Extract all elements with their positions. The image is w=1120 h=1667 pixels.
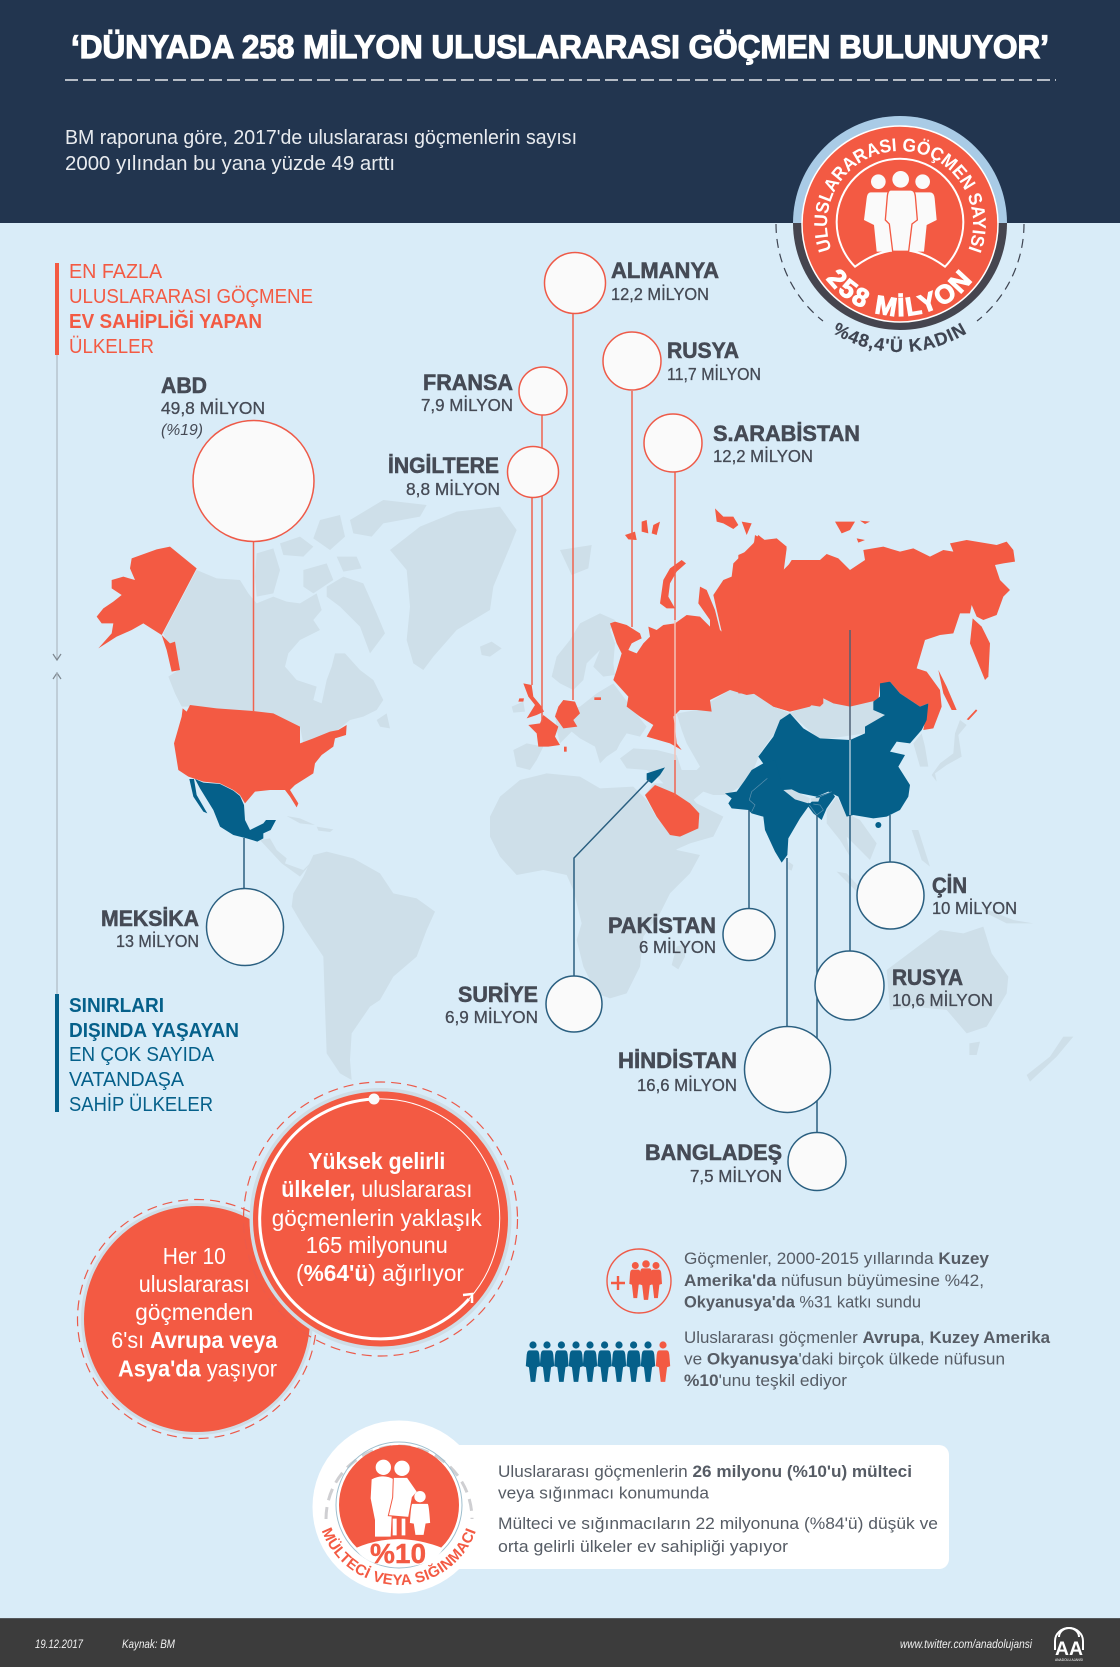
text: population growth: Amerika'da nüfusun büyümesine %42, [684, 1271, 981, 1290]
marker: Meksika: MEKSİKA [101, 906, 199, 931]
footer: 19.12.2017 [35, 1637, 84, 1651]
marker: Çin: ÇİN [932, 873, 967, 898]
landmass: South America and Africa [292, 773, 723, 1080]
marker: Fransa [421, 367, 567, 722]
header band [0, 0, 1120, 223]
subtitle: 2000 yılından bu yana yüzde 49 arttı [65, 153, 395, 175]
panel: refugees text: orta gelirli ülkeler ev sahipliği yapıyor [498, 1537, 788, 1556]
marker: Almanya [544, 252, 719, 700]
text: population growth: Göçmenler, 2000-2015 yıllarında Kuzey [684, 1249, 988, 1268]
legend: host countries: EV SAHİPLİĞİ YAPAN [69, 309, 262, 333]
legend: origin countries [55, 994, 245, 1116]
marker: Rusya (host): 11,7 MİLYON [667, 364, 761, 384]
text: ten percent of population: Uluslararası göçmenler Avrupa, Kuzey Amerika [684, 1328, 1051, 1347]
marker: Rusya (host) [603, 332, 761, 627]
marker: Pakistan: PAKİSTAN [608, 913, 716, 938]
country: Saudi Arabia [645, 785, 699, 837]
badge: 258 million migrants [775, 116, 1025, 352]
marker: ABD: (%19) [161, 422, 203, 439]
panel: refugees text: veya sığınmacı konumunda [498, 1484, 710, 1502]
text: ten percent of population [684, 1328, 1055, 1390]
marker: İngiltere: İNGİLTERE [388, 453, 499, 478]
curved note: women share: %48,4'Ü KADIN [834, 322, 966, 352]
callout: high income countries: 165 milyonunu [306, 1232, 448, 1258]
marker: Rusya (host): RUSYA [667, 338, 739, 363]
icon: ten people row [526, 1341, 670, 1382]
curved label: refugee or asylum seeker: MÜLTECİ VEYA SIĞINMACI [322, 1527, 476, 1586]
icon: agency logo: AA [1055, 1639, 1083, 1660]
arrows: legend connector [53, 355, 61, 994]
legend: origin countries: SINIRLARI [69, 995, 164, 1017]
footer [0, 1618, 1120, 1667]
icon: three people on a hill [837, 159, 963, 267]
footer: Kaynak: BM [122, 1637, 175, 1651]
legend: origin countries: EN ÇOK SAYIDA [69, 1044, 215, 1066]
panel: refugees text [440, 1445, 949, 1569]
marker: Hindistan [618, 858, 830, 1112]
text: population growth [684, 1249, 994, 1312]
icon: agency logo: ANADOLU AJANSI [1055, 1657, 1083, 1662]
country: Mexico [189, 779, 276, 842]
country: United States [97, 547, 347, 807]
text: ten percent of population: ve Okyanusya'daki birçok ülkede nüfusun [684, 1350, 1003, 1368]
marker: Çin [857, 815, 1017, 929]
marker: Rusya (origin): 10,6 MİLYON [892, 990, 993, 1010]
curved value: 258 million: 258 MİLYON [826, 269, 972, 317]
landmass: East Asia [727, 693, 967, 782]
marker: İngiltere: 8,8 MİLYON [406, 479, 500, 499]
marker: Pakistan: 6 MİLYON [639, 937, 716, 957]
country: Russia west, UK, France, Germany [518, 508, 823, 752]
callout: Europe and Asia share: Her 10 [163, 1243, 226, 1269]
legend: host countries [55, 261, 319, 358]
marker: Bangladeş: BANGLADEŞ [645, 1140, 782, 1165]
landmass: Southeast Asia and Oceania [788, 797, 1073, 1082]
marker: Suudi Arabistan: 12,2 MİLYON [713, 446, 813, 466]
icon: family [355, 1460, 443, 1567]
marker: Suriye: 6,9 MİLYON [445, 1007, 538, 1027]
marker: İngiltere [388, 446, 558, 685]
marker: Rusya (origin) [815, 630, 993, 1020]
marker: Bangladeş [645, 815, 846, 1190]
marker: Meksika: 13 MİLYON [116, 931, 199, 951]
marker: Meksika [101, 838, 284, 966]
legend: origin countries: DIŞINDA YAŞAYAN [69, 1020, 239, 1042]
callout: Europe and Asia share: uluslararası [139, 1271, 250, 1297]
world map [97, 500, 1073, 1082]
legend: origin countries: SAHİP ÜLKELER [69, 1093, 213, 1116]
marker: Suriye: SURİYE [458, 982, 538, 1007]
marker: Suriye [445, 779, 650, 1032]
callout: Europe and Asia share: Asya'da yaşıyor [118, 1356, 281, 1382]
legend: host countries: ÜLKELER [69, 336, 154, 358]
callout: high income countries: (%64'ü) ağırlıyor [296, 1260, 465, 1286]
callout: Europe and Asia share [78, 1200, 316, 1438]
text: ten percent of population: %10'unu teşkil ediyor [684, 1371, 845, 1390]
marker: Hindistan: 16,6 MİLYON [637, 1075, 737, 1095]
country: India, Pakistan, Bangladesh [725, 760, 881, 863]
marker: Suudi Arabistan: S.ARABİSTAN [713, 421, 860, 446]
marker: Rusya (origin): RUSYA [892, 965, 963, 990]
callout: Europe and Asia share: 6'sı Avrupa veya [111, 1327, 286, 1353]
country: Syria [647, 767, 665, 783]
title: ‘DÜNYADA 258 MİLYON ULUSLARARASI GÖÇMEN BULUNUYOR’ [71, 29, 1049, 65]
footer: www.twitter.com/anadolujansi [900, 1637, 1032, 1651]
badge: refugees ten percent [312, 1420, 476, 1594]
marker: Almanya: ALMANYA [611, 258, 719, 283]
marker: Hindistan: HİNDİSTAN [618, 1048, 737, 1073]
marker: ABD: ABD [161, 373, 207, 398]
marker: Çin: 10 MİLYON [932, 898, 1017, 918]
icon: agency logo [1055, 1628, 1083, 1662]
landmass: Europe and western Asia [512, 545, 787, 800]
legend: host countries: EN FAZLA [69, 261, 163, 283]
marker: Fransa: FRANSA [423, 370, 513, 395]
legend: origin countries: VATANDAŞA [69, 1069, 185, 1091]
text: population growth: Okyanusya'da %31 katkı sundu [684, 1292, 925, 1312]
country: China [758, 682, 928, 818]
marker: Fransa: 7,9 MİLYON [421, 395, 513, 415]
marker: Bangladeş: 7,5 MİLYON [690, 1166, 782, 1186]
country: Russia east [738, 521, 1015, 730]
marker: ABD: 49,8 MİLYON [161, 398, 265, 418]
panel: refugees text: Uluslararası göçmenlerin 26 milyonu (%10'u) mülteci [498, 1462, 910, 1481]
panel: refugees text: Mülteci ve sığınmacıların 22 milyonuna (%84'ü) düşük ve [498, 1514, 938, 1533]
marker: Suudi Arabistan [644, 414, 860, 796]
callout: high income countries: ülkeler, uluslararası [281, 1176, 481, 1202]
callout: Europe and Asia share: göçmenden [135, 1299, 253, 1325]
callout: high income countries: Yüksek gelirli [308, 1148, 445, 1174]
callout: high income countries [244, 1082, 518, 1356]
curved label: migrant count: ULUSLARARASI GÖÇMEN SAYISI [814, 138, 986, 253]
legend: host countries: ULUSLARARASI GÖÇMENE [69, 286, 313, 308]
icon: plus with three people [607, 1249, 671, 1313]
callout: high income countries: göçmenlerin yaklaşık [272, 1205, 482, 1231]
subtitle: BM raporuna göre, 2017'de uluslararası göçmenlerin sayısı [65, 127, 577, 149]
marker: Almanya: 12,2 MİLYON [611, 284, 709, 304]
value: ten percent: %10 [370, 1538, 426, 1569]
landmass: Americas and Arctic [163, 500, 517, 877]
marker: ABD [161, 373, 314, 712]
marker: Pakistan [608, 810, 775, 960]
